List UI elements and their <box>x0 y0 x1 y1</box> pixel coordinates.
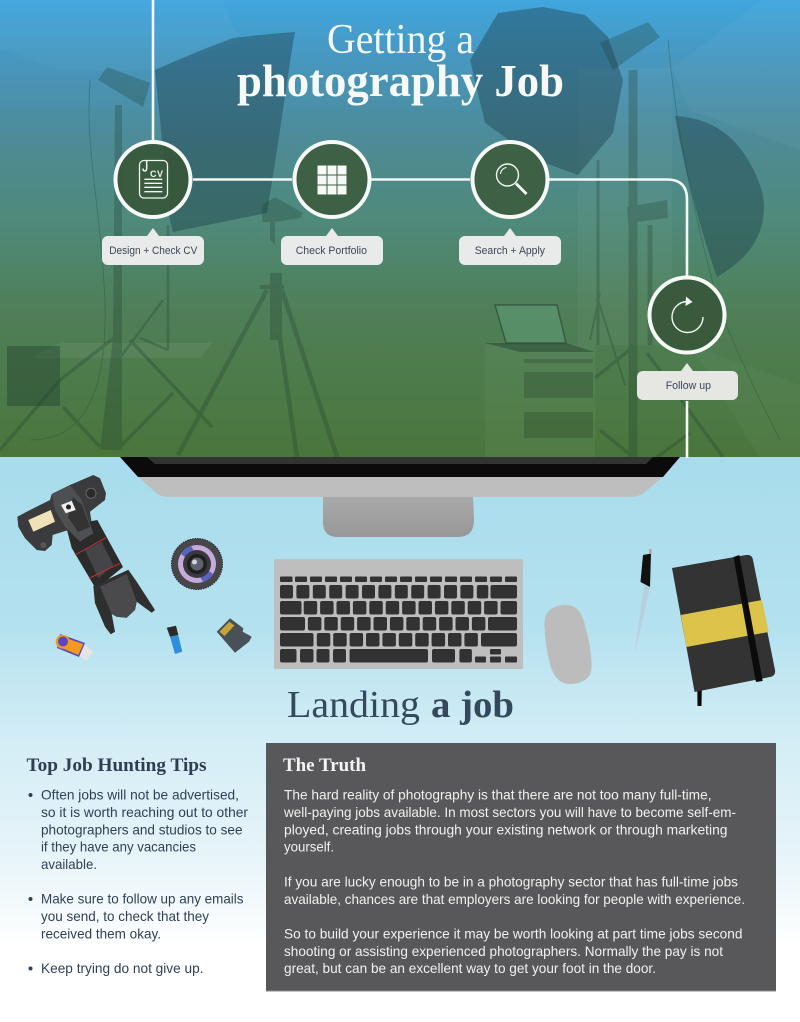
icon: portfolio grid <box>318 166 346 194</box>
paragraph 2: If you are lucky enough to be in a photography sector that has full-time jobs <box>284 874 738 890</box>
paragraph 1: well-paying jobs available. In most sectors you will have to become self-em- <box>283 804 736 820</box>
title: photography Job <box>237 56 564 106</box>
paragraph 1 <box>283 786 736 855</box>
title <box>237 17 564 106</box>
tip 2: Make sure to follow up any emails <box>41 890 244 906</box>
memory card <box>217 618 252 653</box>
label: follow up: Follow up <box>666 380 711 392</box>
notebook <box>672 555 775 706</box>
softbox: octagon <box>470 7 623 175</box>
panel: top job hunting tips <box>26 755 248 976</box>
tip 3: Keep trying do not give up. <box>41 960 204 976</box>
icon: refresh arrow <box>672 296 703 332</box>
usb stick: orange <box>56 634 93 661</box>
heading: top job hunting tips: Top Job Hunting Tips <box>26 755 206 776</box>
step 2: check portfolio <box>281 142 383 265</box>
background: studio scene <box>0 0 800 458</box>
paragraph 3: So to build your experience it may be worth looking at part time jobs second <box>284 926 742 942</box>
label: design and check CV: Design + Check CV <box>109 245 198 257</box>
paragraph 1: ployed, creating jobs through your existing network or through marketing <box>284 821 728 837</box>
softbox: left <box>155 32 295 232</box>
connecting path <box>153 0 687 458</box>
paragraph 1: yourself. <box>284 839 334 855</box>
label: search and apply: Search + Apply <box>475 245 545 257</box>
icon: magnifier <box>496 164 526 194</box>
paragraph 3: shooting or assisting experienced photographers. Normally the pay is not <box>284 943 723 959</box>
desk background <box>0 457 800 1022</box>
label: check portfolio: Check Portfolio <box>296 245 367 257</box>
tip 2: received them okay. <box>41 925 161 941</box>
paragraph 1: The hard reality of photography is that there are not too many full-time, <box>284 786 712 802</box>
paragraph 3 <box>284 926 742 976</box>
battery pack <box>7 346 60 406</box>
heading: landing a job: a job <box>431 684 514 726</box>
keyboard <box>274 559 523 669</box>
lens <box>172 538 222 590</box>
tip 1: so it is worth reaching out to other <box>41 804 248 820</box>
monitor <box>120 457 680 537</box>
paragraph 3: great, but can be an excellent way to get your foot in the door. <box>284 960 656 976</box>
tip 2: you send, to check that they <box>41 908 209 924</box>
tip 1: photographers and studios to see <box>41 821 243 837</box>
title: Getting a <box>327 17 474 63</box>
monitor stand <box>323 497 474 537</box>
icon: CV document: CV <box>150 169 163 179</box>
step 3: search and apply <box>459 142 561 265</box>
paragraph 2 <box>284 874 745 907</box>
tip 1: if they have any vacancies <box>41 839 196 855</box>
camera <box>17 475 155 634</box>
softbox: right dome <box>675 116 764 277</box>
paragraph 2: available, chances are that employers are looking for people with experience. <box>284 891 745 907</box>
mouse <box>544 605 592 684</box>
tip 1: available. <box>41 856 97 872</box>
heading: landing a job <box>287 684 514 726</box>
panel: the truth <box>266 743 776 992</box>
usb stick: blue <box>167 626 182 654</box>
pen <box>635 549 652 654</box>
light stands and tripods <box>0 22 780 457</box>
heading: the truth: The Truth <box>283 755 366 776</box>
laptop on cabinet <box>485 305 595 457</box>
heading: landing a job: Landing <box>287 684 420 726</box>
tip 1: Often jobs will not be advertised, <box>41 786 239 802</box>
tip 2 <box>28 890 244 941</box>
step 1: design and check CV <box>102 142 204 265</box>
step 4: follow up <box>637 278 738 400</box>
tip 1 <box>28 786 248 872</box>
